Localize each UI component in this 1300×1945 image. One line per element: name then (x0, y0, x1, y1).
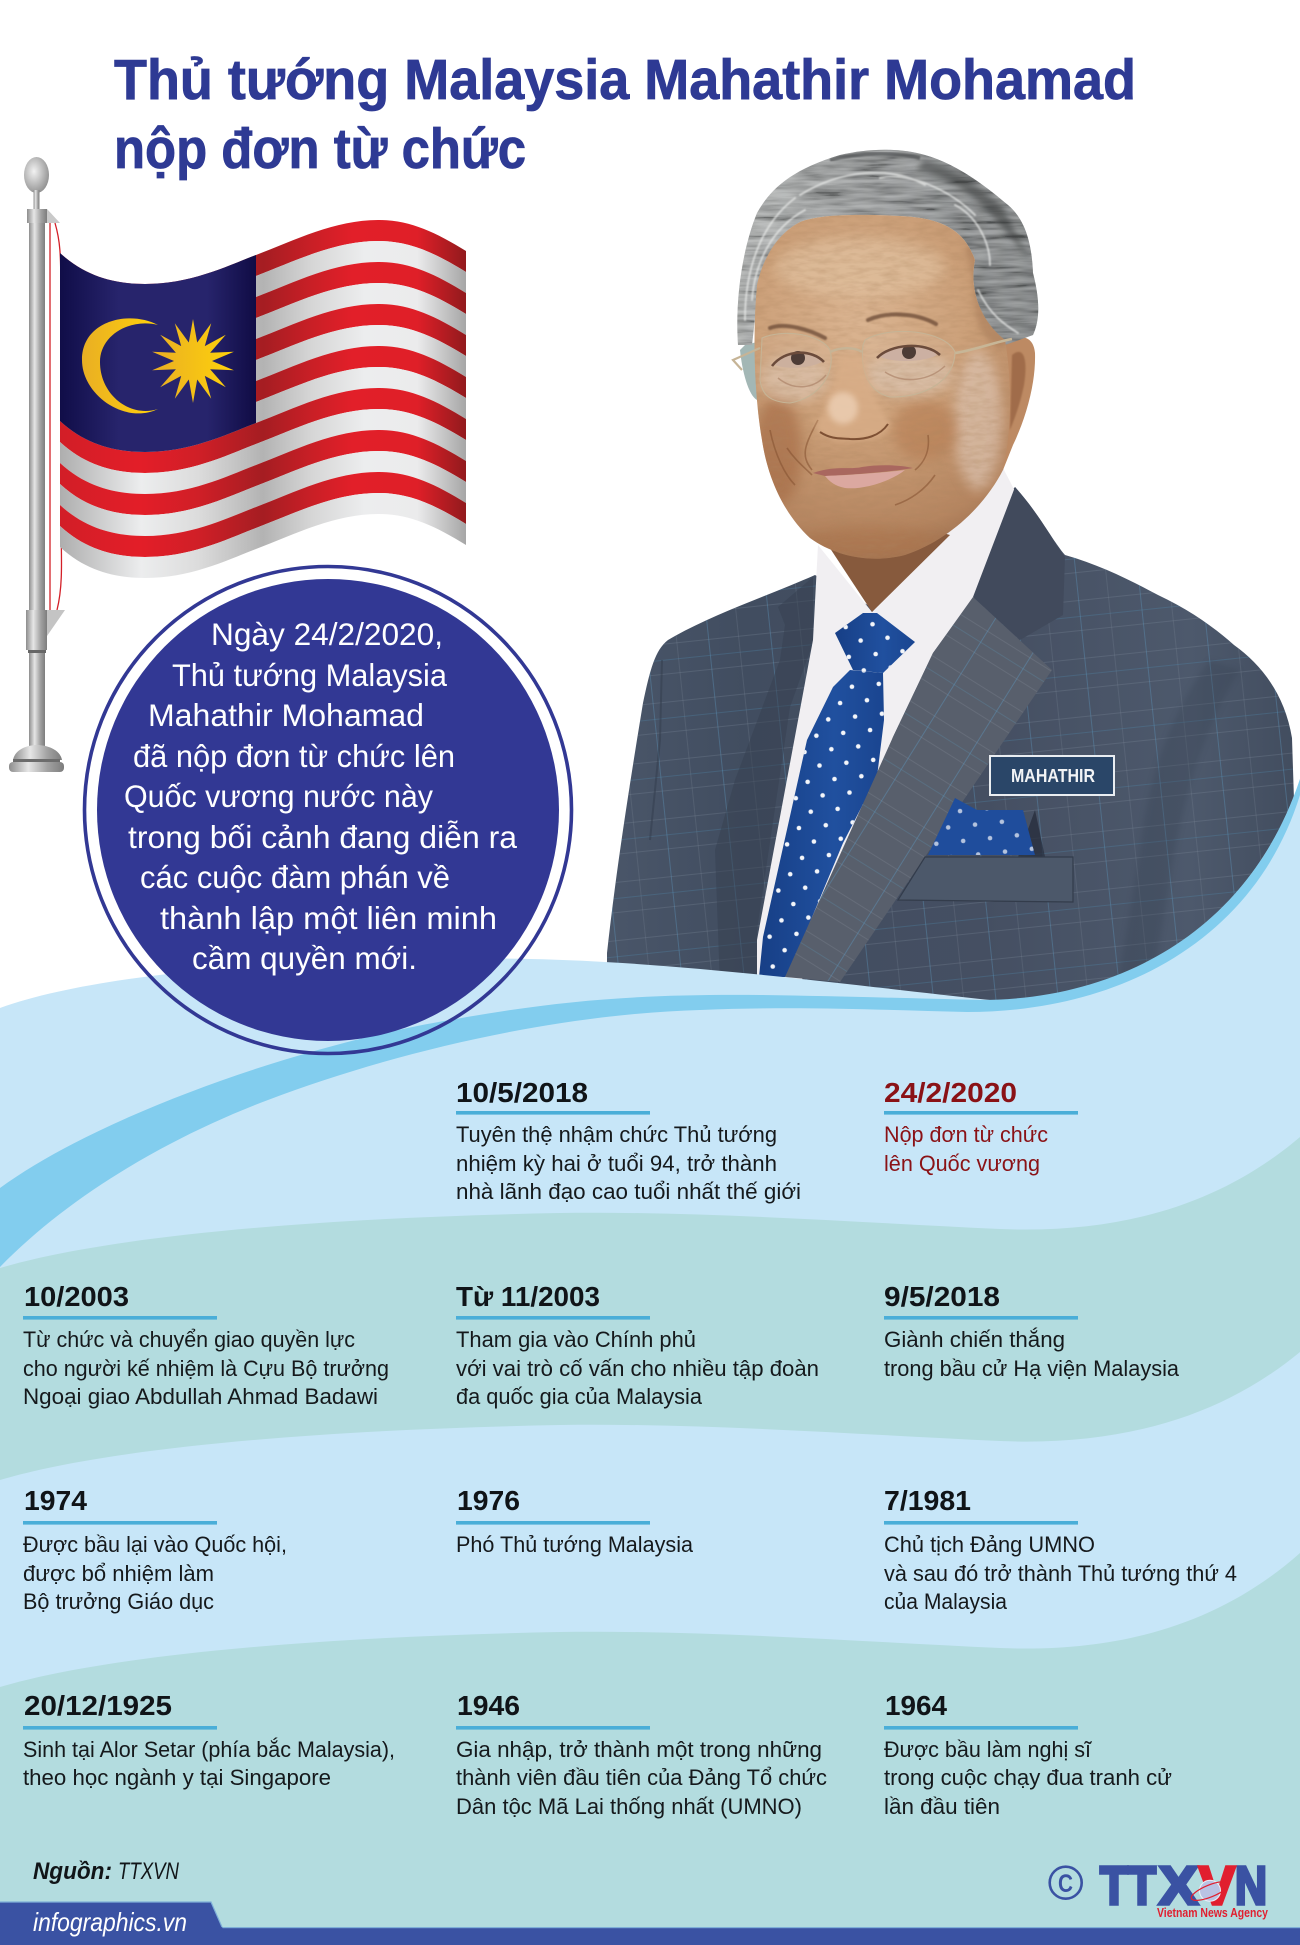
timeline: 7/1981: 7/1981 (884, 1485, 971, 1516)
source credit (33, 1858, 180, 1885)
shirt (757, 468, 1030, 985)
summary text: Ngày 24/2/2020, (211, 616, 443, 652)
wave: teal band 2 (0, 1553, 1300, 1945)
timeline: 10/2003 (23, 1281, 389, 1409)
logo: TTXVN: TT (1100, 1856, 1156, 1916)
timeline: 1976 (456, 1485, 694, 1557)
timeline: 1946 (456, 1690, 827, 1819)
summary text: Thủ tướng Malaysia (172, 657, 447, 693)
timeline: 10/5/2018: nhiệm kỳ hai ở tuổi 94, trở thành (456, 1151, 777, 1176)
glasses temple left (740, 342, 757, 400)
title: Thủ tướng Malaysia Mahathir Mohamad (114, 48, 1136, 112)
timeline: 10/2003: Ngoại giao Abdullah Ahmad Badawi (23, 1384, 378, 1409)
timeline: 24/2/2020: lên Quốc vương (884, 1151, 1040, 1176)
icon: Malaysian flag (60, 220, 466, 578)
timeline: 24/2/2020: Nộp đơn từ chức (884, 1122, 1048, 1147)
timeline: 9/5/2018: trong bầu cử Hạ viện Malaysia (884, 1356, 1180, 1381)
neck (818, 520, 950, 612)
timeline: 20/12/1925: Sinh tại Alor Setar (phía bắc Malaysia), (23, 1737, 395, 1762)
chest pocket (898, 857, 1073, 902)
eyes (772, 345, 945, 387)
timeline: 20/12/1925: theo học ngành y tại Singapore (23, 1765, 331, 1790)
timeline: 1946: Gia nhập, trở thành một trong những (456, 1737, 822, 1762)
timeline: 7/1981: và sau đó trở thành Thủ tướng thứ 4 (884, 1561, 1237, 1586)
timeline: Từ 11/2003: Từ 11/2003 (456, 1281, 600, 1312)
timeline: 1964 (884, 1690, 1172, 1819)
eyebrows (770, 314, 936, 338)
icon: flag pole (9, 157, 65, 772)
timeline: 1976: Phó Thủ tướng Malaysia (456, 1532, 694, 1557)
portrait photo of Mahathir Mohamad (607, 145, 1294, 1010)
timeline: 1964: Được bầu làm nghị sĩ (884, 1737, 1092, 1762)
timeline: 1974: Bộ trưởng Giáo dục (23, 1589, 214, 1614)
timeline: 9/5/2018: 9/5/2018 (884, 1281, 1000, 1312)
mouth (813, 465, 913, 488)
timeline: 10/5/2018: nhà lãnh đạo cao tuổi nhất thế giới (456, 1179, 801, 1204)
pocket square (928, 798, 1045, 857)
timeline: 20/12/1925: 20/12/1925 (24, 1690, 172, 1721)
timeline: Từ 11/2003: với vai trò cố vấn cho nhiều tập đoàn (456, 1356, 819, 1381)
timeline: 10/2003: cho người kế nhiệm là Cựu Bộ trưởng (23, 1356, 389, 1381)
timeline: 20/12/1925 (23, 1690, 395, 1790)
name badge: MAHATHIR (1011, 766, 1095, 786)
timeline: 1976: 1976 (457, 1485, 520, 1516)
timeline: 24/2/2020: 24/2/2020 (884, 1077, 1017, 1108)
timeline: 10/5/2018: 10/5/2018 (456, 1077, 588, 1108)
timeline: 9/5/2018: Giành chiến thắng (884, 1327, 1065, 1352)
timeline: 1974: 1974 (24, 1485, 87, 1516)
timeline: Từ 11/2003 (456, 1281, 819, 1409)
logo: TTXVN: Vietnam News Agency (1157, 1905, 1269, 1920)
timeline: 1946: thành viên đầu tiên của Đảng Tổ chức (456, 1765, 827, 1790)
footer bar (0, 1902, 1300, 1945)
summary text: Quốc vương nước này (124, 778, 433, 814)
hair (730, 145, 1045, 350)
timeline: 1964: 1964 (885, 1690, 947, 1721)
timeline: 24/2/2020 (884, 1077, 1078, 1176)
face (733, 210, 1015, 565)
logo: TTXVN: N (1235, 1856, 1267, 1916)
source credit: Nguồn: (33, 1858, 112, 1885)
timeline: 10/2003: Từ chức và chuyển giao quyền lực (23, 1327, 355, 1352)
timeline: 7/1981: Chủ tịch Đảng UMNO (884, 1532, 1095, 1557)
summary text: cầm quyền mới. (192, 940, 417, 976)
summary text: thành lập một liên minh (160, 900, 497, 936)
summary text (124, 616, 517, 976)
website label: infographics.vn (33, 1907, 187, 1937)
nose (816, 355, 890, 440)
lapel (785, 597, 1052, 982)
summary text: các cuộc đàm phán về (140, 859, 450, 895)
logo: TTXVN (1050, 1856, 1269, 1920)
wave: medium blue band (0, 779, 1300, 1267)
title (114, 48, 1136, 181)
timeline: 7/1981: của Malaysia (884, 1589, 1008, 1614)
timeline: 1974: Được bầu lại vào Quốc hội, (23, 1532, 287, 1557)
ear (1003, 337, 1035, 470)
timeline: 10/5/2018: Tuyên thệ nhậm chức Thủ tướng (456, 1122, 777, 1147)
timeline: 7/1981 (884, 1485, 1237, 1614)
logo: TTXVN: C (1058, 1870, 1073, 1898)
title: nộp đơn từ chức (114, 117, 526, 181)
timeline: 1974: được bổ nhiệm làm (23, 1561, 214, 1586)
timeline: 1964: lần đầu tiên (884, 1794, 1000, 1819)
logo: TTXVN: V (1199, 1856, 1235, 1916)
timeline: 1946: 1946 (457, 1690, 520, 1721)
timeline: 10/2003: 10/2003 (24, 1281, 129, 1312)
timeline: Từ 11/2003: đa quốc gia của Malaysia (456, 1384, 703, 1409)
timeline: 1974 (23, 1485, 287, 1614)
timeline: 10/5/2018 (456, 1077, 801, 1204)
wave: light blue background (0, 779, 1300, 1945)
logo: TTXVN: X (1159, 1856, 1198, 1916)
summary text: đã nộp đơn từ chức lên (133, 738, 455, 774)
glasses (733, 331, 1012, 403)
summary text: Mahathir Mohamad (148, 697, 424, 733)
timeline: 1946: Dân tộc Mã Lai thống nhất (UMNO) (456, 1794, 802, 1819)
timeline: 9/5/2018 (884, 1281, 1180, 1381)
name badge (990, 756, 1114, 795)
necktie (759, 613, 915, 977)
timeline: Từ 11/2003: Tham gia vào Chính phủ (456, 1327, 696, 1352)
wave: teal band 1 (0, 1137, 1300, 1480)
upper collar (973, 487, 1065, 640)
suit jacket (607, 487, 1294, 1010)
source credit: TTXVN (118, 1858, 180, 1885)
timeline: 1964: trong cuộc chạy đua tranh cử (884, 1765, 1172, 1790)
summary circle (84, 566, 572, 1054)
summary text: trong bối cảnh đang diễn ra (128, 819, 517, 855)
